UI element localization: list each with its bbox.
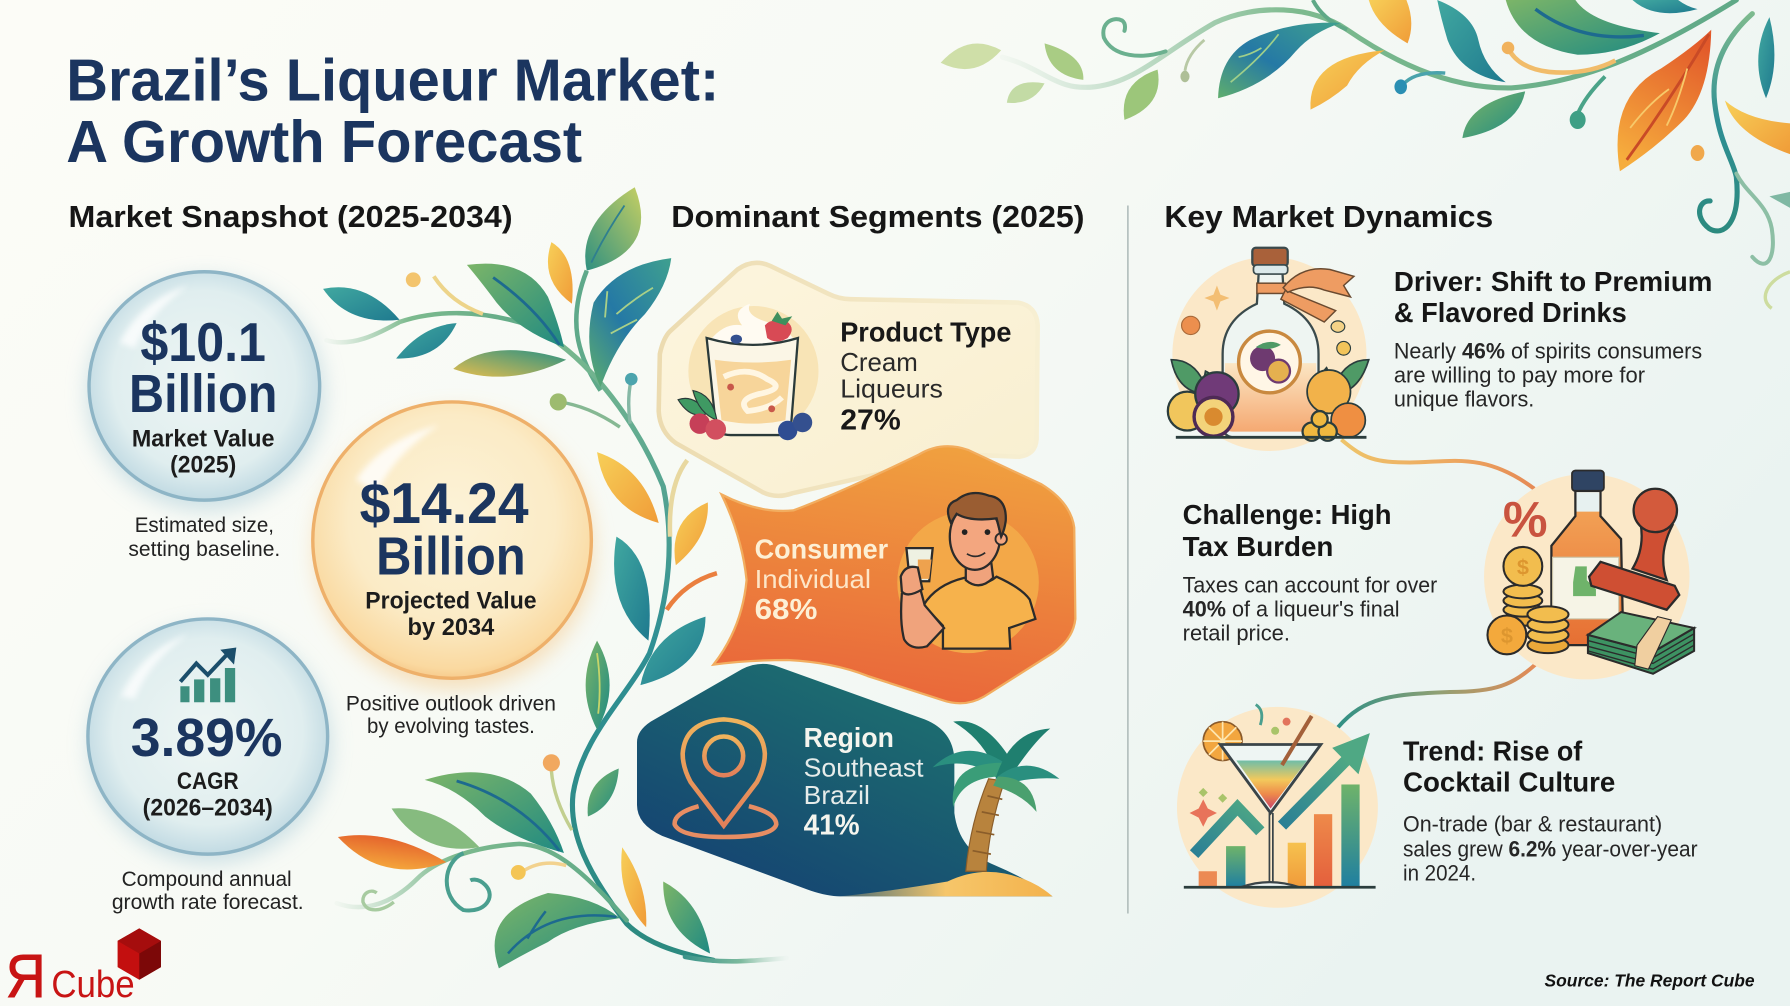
metric bubble: market value: $10.1: [140, 311, 266, 373]
panel: consumer: 68%: [755, 594, 817, 626]
text: challenge: Challenge: High: [1183, 499, 1392, 530]
logo: RCube: Cube: [51, 963, 135, 1005]
caption: market value: Estimated size,: [135, 514, 274, 537]
text: driver: & Flavored Drinks: [1394, 297, 1627, 328]
panel: product type: [659, 263, 1038, 496]
text: driver: unique flavors.: [1394, 387, 1534, 412]
title: A Growth Forecast: [66, 108, 582, 175]
caption: CAGR: Compound annual: [122, 868, 292, 891]
text: challenge: [1183, 499, 1438, 646]
metric bubble: projected value: Billion: [376, 526, 526, 586]
metric bubble: CAGR: CAGR: [177, 768, 239, 795]
metric bubble: projected value: [313, 402, 594, 690]
caption: market value: setting baseline.: [128, 538, 280, 561]
icon: location pin: [675, 719, 776, 837]
caption: CAGR: growth rate forecast.: [112, 891, 304, 914]
icon: cocktail and growth chart: [1177, 705, 1378, 908]
text: driver: Driver: Shift to Premium: [1394, 266, 1712, 297]
text: driver: Nearly 46% of spirits consumers: [1394, 339, 1702, 364]
text: trend: sales grew 6.2% year-over-year: [1403, 836, 1698, 861]
caption: projected value: Positive outlook driven: [346, 692, 556, 715]
dollar signs: $: [1501, 623, 1513, 648]
text: trend: Cocktail Culture: [1403, 766, 1615, 797]
metric bubble: projected value: Projected Value: [365, 588, 537, 615]
text: trend: Trend: Rise of: [1403, 735, 1583, 766]
connector: challenge to trend: [1338, 663, 1537, 727]
panel: product type: Product Type: [840, 316, 1011, 347]
column divider: [1127, 206, 1129, 914]
heading: dominant segments: Dominant Segments (2025): [671, 199, 1085, 234]
text: challenge: Taxes can account for over: [1183, 573, 1438, 598]
title: Brazil’s Liqueur Market:: [66, 46, 719, 113]
metric bubble: CAGR: 3.89%: [131, 708, 283, 768]
text: challenge: Tax Burden: [1183, 531, 1333, 562]
heading: key market dynamics: Key Market Dynamics: [1164, 199, 1493, 234]
metric bubble: CAGR: [88, 619, 331, 863]
text: driver: [1394, 266, 1712, 412]
icon: tax bottle, coins and stamp: %: [1503, 492, 1547, 548]
caption: market value: [128, 514, 280, 561]
panel: region: Region: [804, 722, 894, 753]
text: challenge: retail price.: [1183, 621, 1290, 646]
metric bubble: CAGR: (2026–2034): [143, 794, 273, 821]
metric bubble: market value: Billion: [129, 364, 277, 424]
panel: product type: Liqueurs: [840, 373, 943, 403]
caption: projected value: by evolving tastes.: [367, 715, 535, 738]
dollar signs: $: [1517, 554, 1529, 579]
ribbon: [1257, 269, 1354, 322]
icon: cream liqueur glass: [678, 304, 819, 440]
metric bubble: market value: (2025): [170, 452, 236, 479]
icon: person with drink: [897, 493, 1039, 653]
logo: RCube: [6, 928, 161, 1006]
icon: palm tree: [933, 721, 1059, 871]
stamp: [1589, 489, 1679, 610]
caption: CAGR: [112, 868, 304, 914]
cash: [1588, 612, 1694, 674]
text: trend: in 2024.: [1403, 860, 1476, 885]
panel: region: 41%: [804, 810, 860, 842]
metric bubble: projected value: by 2034: [408, 614, 495, 641]
coins: [1487, 547, 1569, 654]
text: driver: are willing to pay more for: [1394, 363, 1646, 388]
panel: product type: Cream: [840, 347, 918, 377]
dollar signs: [1501, 554, 1529, 648]
panel: product type: 27%: [840, 404, 901, 436]
decorative vine: central stem and leaves: [323, 187, 787, 968]
metric bubble: projected value: $14.24: [360, 472, 529, 536]
title: [66, 46, 719, 175]
icon: growth chart: [180, 647, 236, 702]
icon: tax bottle, coins and stamp: [1484, 470, 1694, 679]
panel: consumer: Individual: [755, 564, 871, 594]
caption: projected value: [346, 692, 556, 738]
heading: market snapshot: Market Snapshot (2025-2034): [68, 199, 513, 234]
panel: consumer: [713, 446, 1075, 703]
panel: consumer: Consumer: [755, 533, 888, 564]
panel: region: [637, 664, 1059, 896]
text: trend: On-trade (bar & restaurant): [1403, 811, 1662, 836]
icon: premium bottle with fruit: [1168, 248, 1369, 451]
panel: region: Brazil: [804, 780, 870, 810]
panel: region: Southeast: [804, 752, 924, 782]
text: trend: [1403, 735, 1698, 885]
metric bubble: market value: Market Value: [132, 425, 275, 452]
text: challenge: 40% of a liqueur's final: [1183, 597, 1400, 622]
source note: Source: The Report Cube: [1545, 971, 1755, 991]
metric bubble: market value: [87, 272, 324, 510]
decorative vine: top right: [941, 0, 1790, 308]
connector: driver to challenge: [1341, 440, 1534, 489]
